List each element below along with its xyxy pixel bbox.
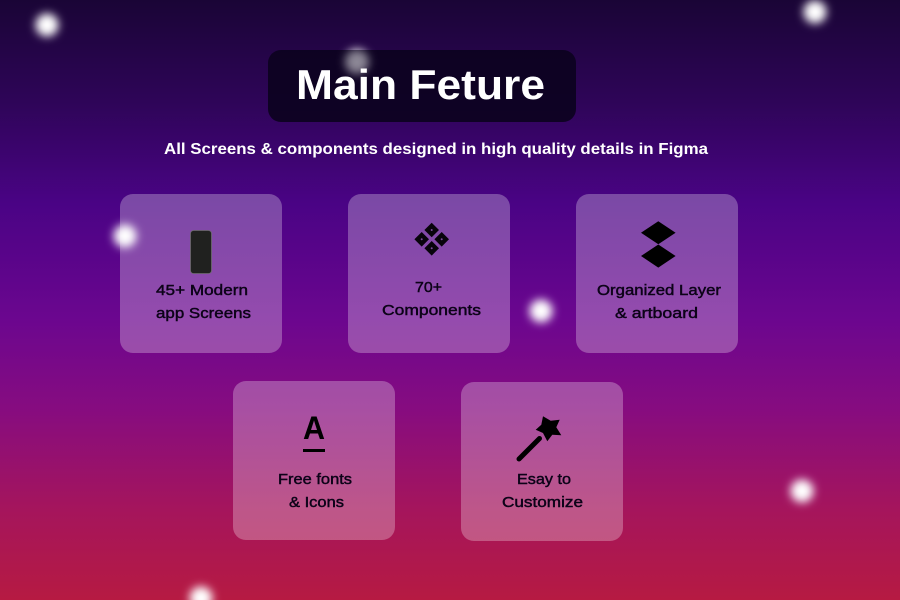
label: modern app screens: app Screens [156,305,251,322]
panel: components [348,194,510,353]
label: components [382,279,481,319]
label: free fonts: Free fonts [278,471,352,488]
subtitle: All Screens & components designed in high quality details in Figma [164,141,708,158]
icon: magic wand [519,416,561,459]
title [268,50,576,122]
panel: modern app screens [120,194,282,353]
title: Main Feture [296,61,545,108]
label: easy to customize [502,471,583,511]
label: components: 70+ [415,279,442,296]
label: modern app screens [156,282,251,322]
label: free fonts: & Icons [289,494,344,511]
label: free fonts [278,471,352,511]
icon: phone [190,230,212,274]
label: components: Components [382,302,481,319]
label: organized layers [597,282,721,322]
panel: easy to customize [461,382,623,541]
label: organized layers: Organized Layer [597,282,721,299]
label: organized layers: & artboard [615,305,698,322]
icon: layers [641,221,676,268]
label: modern app screens: 45+ Modern [156,282,248,299]
icon: component diamonds [414,223,449,256]
label: easy to customize: Customize [502,494,583,511]
panel: organized layers [576,194,738,353]
label: easy to customize: Esay to [517,471,571,488]
panel: free fonts [233,381,395,540]
icon: letter A: A [303,410,325,446]
